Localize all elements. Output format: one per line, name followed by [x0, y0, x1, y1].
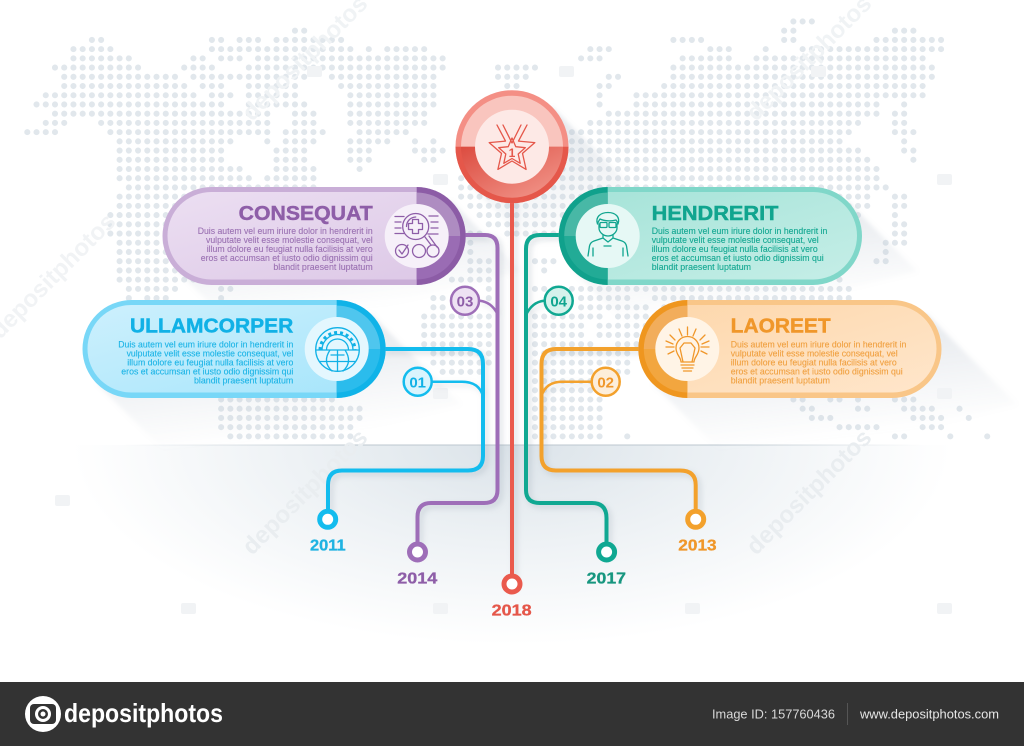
text block: Duis autem vel eum iriure dolor in hendrerit in — [198, 226, 373, 237]
badge 04: 04 — [550, 293, 568, 310]
central badge — [456, 90, 568, 203]
text block: blandit praesent luptatum — [731, 375, 830, 386]
dotted world map — [27, 21, 987, 436]
milestone 2014: 2014 — [397, 570, 438, 587]
badge 03: 03 — [457, 293, 473, 310]
text block: illum dolore eu feugiat nulla facilisis at vero — [652, 244, 818, 255]
panel: hendrerit — [559, 187, 862, 285]
text block: Duis autem vel eum iriure dolor in hendrerit in — [731, 339, 906, 350]
icon: light bulb — [666, 327, 709, 371]
long shadows — [97, 107, 1017, 474]
text block: vulputate velit esse molestie consequat, vel — [731, 348, 898, 359]
icon: star with number one: 1 — [509, 146, 516, 160]
orange branch — [542, 382, 591, 396]
milestone 2014 — [397, 544, 438, 587]
footer bar — [0, 682, 1024, 746]
text block: eros et accumsan et iusto odio dignissim qui — [201, 253, 373, 264]
purple line to 2014 — [418, 235, 498, 552]
watermark: depositphotos — [237, 424, 373, 560]
badge 01 — [404, 368, 432, 396]
text block — [652, 226, 827, 273]
panel: ullamcorper — [82, 300, 386, 398]
heading: ULLAMCORPER — [130, 315, 293, 338]
icon: analysis magnifier — [395, 214, 439, 258]
panel: laoreet — [638, 300, 942, 398]
milestone 2017 — [587, 544, 626, 587]
text block: illum dolore eu feugiat nulla facilisis at vero — [127, 357, 293, 368]
site url: www.depositphotos.com — [859, 708, 999, 722]
milestone 2011: 2011 — [310, 538, 346, 555]
milestone 2013: 2013 — [678, 538, 717, 555]
heading: CONSEQUAT — [239, 202, 373, 225]
badge 02 — [592, 368, 620, 396]
badge 03 — [451, 287, 479, 315]
red line to 2018 — [510, 200, 514, 584]
teal branch — [526, 301, 544, 315]
timeline connectors — [328, 200, 696, 584]
orange line to 2013 — [542, 349, 696, 519]
milestone 2018 — [492, 576, 532, 619]
badge 01: 01 — [409, 374, 426, 391]
text block: Duis autem vel eum iriure dolor in hendrerit in — [652, 226, 827, 237]
heading: HENDRERIT — [652, 202, 779, 225]
milestone 2018: 2018 — [492, 602, 532, 619]
background floor shading — [0, 445, 1024, 682]
text block: eros et accumsan et iusto odio dignissim qui — [731, 366, 903, 377]
watermark — [0, 0, 952, 614]
badge 04 — [545, 287, 573, 315]
purple branch — [480, 301, 497, 313]
text block: illum dolore eu feugiat nulla facilisis at vero — [207, 244, 373, 255]
badge 02: 02 — [597, 374, 614, 391]
text block: Duis autem vel eum iriure dolor in hendrerit in — [118, 339, 293, 350]
text block: eros et accumsan et iusto odio dignissim qui — [121, 366, 293, 377]
image id: Image ID: 157760436 — [712, 708, 835, 722]
text block: eros et accumsan et iusto odio dignissim qui — [652, 253, 824, 264]
blue branch — [432, 382, 483, 396]
horizon line — [0, 444, 1024, 446]
milestone 2017: 2017 — [587, 570, 626, 587]
icon: camera logo — [25, 696, 61, 732]
milestone 2013 — [678, 511, 717, 555]
blue line to 2011 — [328, 349, 483, 519]
icon: globe with gear — [316, 328, 359, 371]
text block: vulputate velit esse molestie consequat, vel — [652, 235, 819, 246]
milestone 2011 — [310, 511, 346, 555]
text block — [198, 226, 373, 273]
heading: LAOREET — [731, 315, 831, 338]
teal line to 2017 — [526, 235, 606, 552]
text block — [731, 339, 906, 386]
text block — [118, 339, 293, 386]
brand name: depositphotos — [64, 698, 223, 728]
text block: blandit praesent luptatum — [652, 262, 751, 273]
panel: consequat — [162, 187, 466, 285]
text block: illum dolore eu feugiat nulla facilisis at vero — [731, 357, 897, 368]
text block: blandit praesent luptatum — [194, 375, 293, 386]
icon: person with glasses — [588, 212, 628, 256]
text block: vulputate velit esse molestie consequat, vel — [206, 235, 373, 246]
watermark: depositphotos — [741, 424, 877, 560]
text block: blandit praesent luptatum — [273, 262, 373, 273]
text block: vulputate velit esse molestie consequat, vel — [127, 348, 293, 359]
